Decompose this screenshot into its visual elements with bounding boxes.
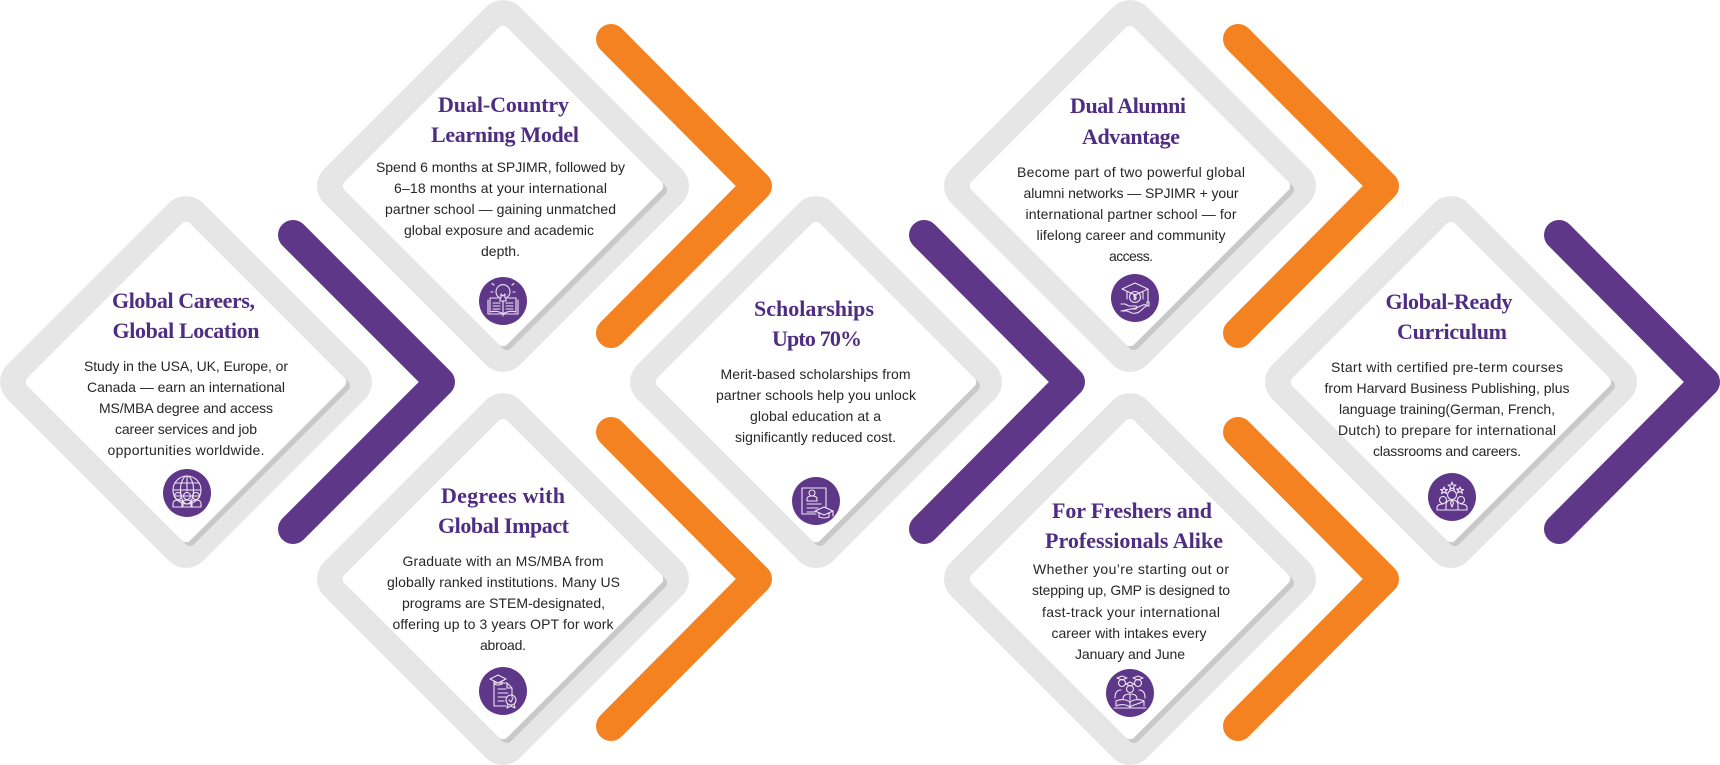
diamond frame bbox=[934, 383, 1326, 765]
arrow: orange chevron 3 bbox=[1238, 39, 1384, 333]
diamond frame bbox=[307, 383, 699, 765]
body text: access. bbox=[1109, 248, 1153, 264]
body text: language training(German, French, bbox=[1339, 401, 1555, 417]
body text bbox=[387, 553, 620, 653]
body text: offering up to 3 years OPT for work bbox=[392, 616, 614, 632]
heading bbox=[1045, 498, 1223, 553]
body text: Start with certified pre-term courses bbox=[1331, 359, 1563, 375]
body text: international partner school — for bbox=[1026, 206, 1237, 222]
body text: partner school — gaining unmatched bbox=[385, 201, 616, 217]
heading: Learning Model bbox=[431, 122, 579, 147]
body text bbox=[1017, 164, 1245, 264]
body text: global education at a bbox=[750, 408, 881, 424]
body text: Graduate with an MS/MBA from bbox=[402, 553, 604, 569]
body text: globally ranked institutions. Many US bbox=[387, 574, 620, 590]
heading bbox=[1386, 289, 1512, 344]
body text bbox=[376, 159, 625, 259]
diamond frame bbox=[307, 0, 699, 382]
icon: graduates above book bbox=[1106, 669, 1154, 717]
heading: Global Careers, bbox=[112, 288, 255, 313]
heading: Dual Alumni bbox=[1070, 93, 1186, 118]
body text: fast-track your international bbox=[1042, 604, 1220, 620]
arrow: purple chevron 2 bbox=[924, 235, 1070, 529]
body text: classrooms and careers. bbox=[1373, 443, 1521, 459]
body text: career services and job bbox=[115, 421, 257, 437]
panel: dual-country learning model bbox=[307, 0, 699, 382]
icon: scholarship document and cap bbox=[792, 477, 840, 525]
panel: dual alumni advantage bbox=[934, 0, 1326, 382]
panel: degrees with global impact bbox=[307, 383, 699, 765]
body text: Become part of two powerful global bbox=[1017, 164, 1245, 180]
arrow: orange chevron 4 bbox=[1238, 432, 1384, 726]
icon: cap, coin and hand bbox=[1111, 274, 1159, 322]
panel: scholarships bbox=[620, 186, 1012, 578]
icon: team with stars bbox=[1428, 473, 1476, 521]
icon: globe with people bbox=[163, 469, 211, 517]
body text: stepping up, GMP is designed to bbox=[1032, 582, 1230, 598]
diamond frame bbox=[620, 186, 1012, 578]
icon: lightbulb over book bbox=[479, 277, 527, 325]
body text: lifelong career and community bbox=[1036, 227, 1226, 243]
body text bbox=[716, 366, 917, 445]
body text: abroad. bbox=[480, 637, 526, 653]
body text: from Harvard Business Publishing, plus bbox=[1324, 380, 1570, 396]
heading: Global Location bbox=[112, 318, 260, 343]
heading: Advantage bbox=[1082, 124, 1180, 149]
diamond frame bbox=[934, 0, 1326, 382]
arrow: purple chevron 3 bbox=[1559, 235, 1705, 529]
panel: global-ready curriculum bbox=[1255, 186, 1647, 578]
body text: significantly reduced cost. bbox=[735, 429, 896, 445]
panel: global careers bbox=[0, 186, 382, 578]
icon: certificate with graduation cap bbox=[479, 667, 527, 715]
heading: Upto 70% bbox=[772, 326, 862, 351]
heading: Global Impact bbox=[438, 513, 570, 538]
arrow: orange chevron 1 bbox=[611, 39, 757, 333]
heading: Global-Ready bbox=[1386, 289, 1512, 314]
body text: Merit-based scholarships from bbox=[720, 366, 910, 382]
body text: Dutch) to prepare for international bbox=[1338, 422, 1556, 438]
body text: programs are STEM-designated, bbox=[402, 595, 605, 611]
heading: Degrees with bbox=[441, 483, 565, 508]
body text: MS/MBA degree and access bbox=[99, 400, 273, 416]
heading bbox=[754, 296, 874, 351]
body text: Spend 6 months at SPJIMR, followed by bbox=[376, 159, 625, 175]
heading bbox=[1070, 93, 1186, 149]
body text: global exposure and academic bbox=[404, 222, 594, 238]
body text: 6–18 months at your international bbox=[394, 180, 607, 196]
body text: January and June bbox=[1075, 646, 1185, 662]
heading bbox=[112, 288, 260, 343]
body text: Study in the USA, UK, Europe, or bbox=[84, 358, 288, 374]
body text bbox=[1032, 561, 1230, 662]
arrow: purple chevron 1 bbox=[293, 235, 440, 529]
heading: Curriculum bbox=[1397, 319, 1507, 344]
body text bbox=[84, 358, 288, 458]
panel: freshers and professionals bbox=[934, 383, 1326, 765]
heading: Dual-Country bbox=[438, 92, 569, 117]
body text: Canada — earn an international bbox=[87, 379, 285, 395]
heading bbox=[438, 483, 570, 538]
body text bbox=[1324, 359, 1570, 459]
diamond frame bbox=[0, 186, 382, 578]
body text: opportunities worldwide. bbox=[108, 442, 264, 458]
body text: career with intakes every bbox=[1052, 625, 1206, 641]
heading: For Freshers and bbox=[1052, 498, 1212, 523]
heading: Professionals Alike bbox=[1045, 528, 1223, 553]
body text: depth. bbox=[481, 243, 520, 259]
heading bbox=[431, 92, 579, 147]
body text: alumni networks — SPJIMR + your bbox=[1024, 185, 1239, 201]
body text: Whether you’re starting out or bbox=[1033, 561, 1229, 577]
arrow: orange chevron 2 bbox=[611, 432, 757, 726]
heading: Scholarships bbox=[754, 296, 874, 321]
diamond frame bbox=[1255, 186, 1647, 578]
body text: partner schools help you unlock bbox=[716, 387, 917, 403]
